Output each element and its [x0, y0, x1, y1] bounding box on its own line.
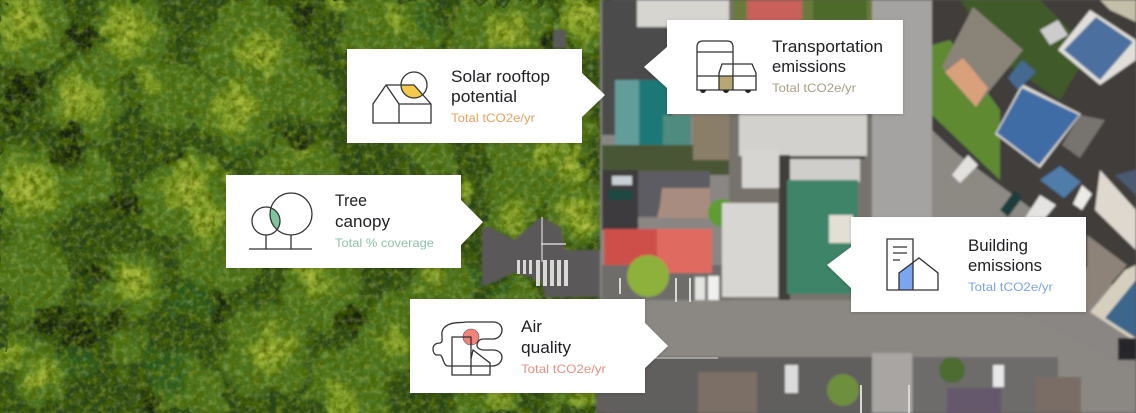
card: solar rooftop potential — [347, 49, 605, 143]
card shape: solar — [347, 49, 605, 143]
tree beside house — [708, 199, 736, 227]
heading: transportation: Transportation — [772, 38, 883, 56]
card shape: air — [410, 299, 668, 393]
metric label: solar: Total tCO2e/yr — [451, 111, 535, 125]
heading: solar: Solar rooftop — [451, 68, 550, 86]
top red roof — [747, 0, 802, 22]
heading: air: quality — [521, 339, 572, 357]
grey house — [638, 171, 710, 217]
heading: building: emissions — [968, 257, 1042, 275]
top white building — [637, 0, 729, 27]
card: air quality — [410, 299, 668, 393]
forest-side road — [482, 217, 600, 297]
icon: tower and house — [887, 239, 938, 290]
teal roof — [615, 80, 645, 145]
metric label: tree: Total % coverage — [335, 236, 434, 250]
aerial photo background: street scene — [482, 0, 1136, 413]
parked cars on lot — [952, 155, 978, 183]
card: building emissions — [827, 217, 1086, 312]
icon: solar house — [373, 72, 431, 123]
street tree — [627, 255, 669, 297]
white lower building — [1025, 195, 1056, 218]
parking lines — [619, 278, 910, 413]
heading: tree: canopy — [335, 213, 391, 231]
horizontal road — [596, 303, 1136, 413]
grey house with orange roof — [942, 7, 1023, 107]
green roof — [787, 180, 858, 294]
parked cars — [695, 277, 705, 301]
icon: cloud over buildings — [433, 322, 502, 375]
metric label: air: Total tCO2e/yr — [521, 362, 606, 376]
card: tree canopy — [226, 175, 483, 268]
card shape: building — [827, 217, 1086, 312]
aerial photo background: forest — [0, 0, 615, 413]
card shape: transportation — [644, 20, 903, 114]
heading: air: Air — [521, 318, 543, 336]
card shape: tree — [226, 175, 483, 268]
heading: transportation: emissions — [772, 58, 846, 76]
card: transportation emissions — [644, 20, 903, 114]
lower-right solar roof — [1090, 265, 1136, 342]
bottom houses — [698, 372, 757, 413]
heading: building: Building — [968, 237, 1028, 255]
top tree — [813, 0, 867, 20]
grey-beige roof — [1087, 235, 1127, 312]
upper-right blue house — [1058, 10, 1136, 85]
icon: bus and van — [697, 41, 756, 93]
right neighbourhood ground — [932, 0, 1136, 300]
heading: solar: potential — [451, 88, 517, 106]
icon: trees — [249, 193, 312, 249]
white roof — [722, 203, 778, 297]
red roofs — [604, 229, 657, 265]
heading: tree: Tree — [335, 192, 367, 210]
small blue annexe — [1040, 166, 1081, 198]
blue house — [995, 84, 1081, 168]
metric label: building: Total tCO2e/yr — [968, 280, 1053, 294]
metric label: transportation: Total tCO2e/yr — [772, 81, 856, 95]
crosswalk — [517, 217, 568, 286]
white warehouse — [739, 114, 867, 156]
